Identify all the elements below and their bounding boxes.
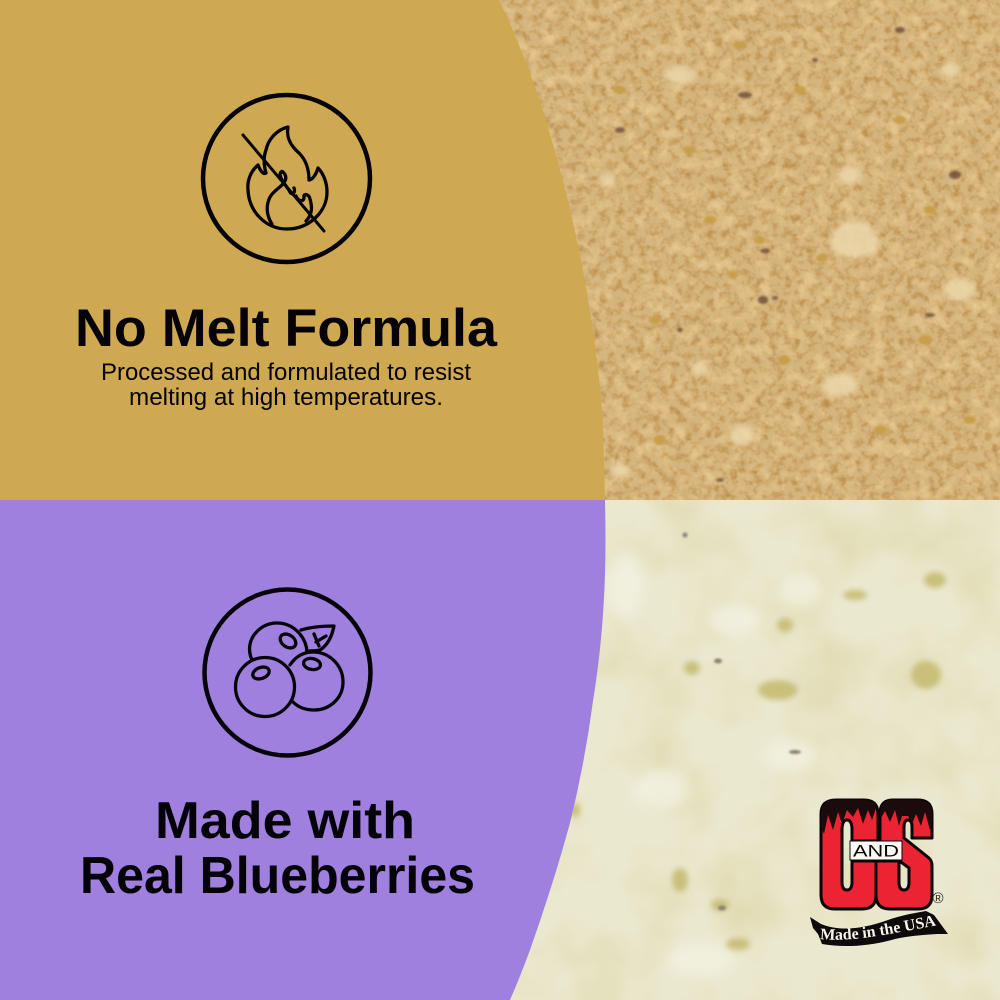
text: formula description: [101, 359, 471, 411]
logo: registered mark: ®: [932, 890, 944, 907]
panel: gold background: [0, 0, 605, 500]
logo: C and S Made in the USA: [810, 798, 948, 946]
title: Made with Real Blueberries: [80, 792, 475, 905]
icon: crossed-out flame: [203, 95, 370, 262]
logo letters: C and S: [821, 800, 932, 909]
logo: banner: [810, 911, 948, 946]
logo: C and S Made in the USA: Made in the USA: [820, 916, 936, 940]
panel: purple background: [0, 500, 606, 1000]
text: formula description: melting at high temperatures.: [129, 384, 443, 411]
title: Made with Real Blueberries: Made with: [155, 792, 415, 850]
title: No Melt Formula: No Melt Formula: [75, 299, 498, 358]
photo texture: blueberry suet: [500, 500, 1000, 1000]
logo: C and S Made in the USA: AND: [853, 842, 899, 860]
photo texture: oat and grain suet: [480, 0, 1000, 500]
title: Made with Real Blueberries: Real Blueberries: [80, 847, 475, 905]
icon: blueberries: [204, 590, 370, 756]
text: formula description: Processed and formulated to resist: [101, 359, 471, 386]
logo: AND box: [850, 841, 902, 860]
